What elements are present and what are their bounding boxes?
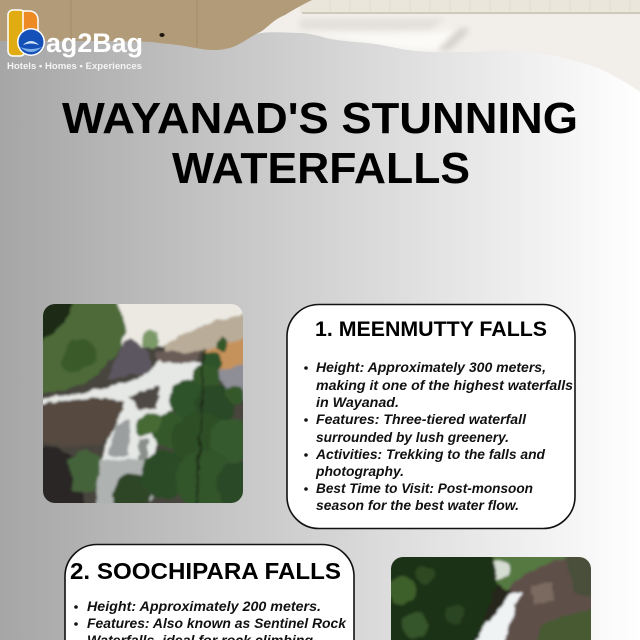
card 1 bullet list	[304, 360, 574, 513]
card 2 bullet list: Height: Approximately 200 meters.	[87, 599, 321, 614]
torn paper header	[0, 0, 640, 92]
card 1 heading: 1. MEENMUTTY FALLS	[315, 318, 547, 341]
brand name: ag2Bag	[46, 28, 143, 58]
title: WATERFALLS	[172, 144, 470, 193]
card 2: Soochipara Falls	[65, 544, 354, 640]
card 1 bullet list: Activities: Trekking to the falls and	[315, 447, 546, 462]
card 1 bullet list: surrounded by lush greenery.	[316, 430, 509, 445]
card 2 heading: 2. SOOCHIPARA FALLS	[70, 558, 341, 584]
card 1 bullet list: Height: Approximately 300 meters,	[316, 360, 546, 375]
card 1 bullet list: Features: Three-tiered waterfall	[316, 412, 526, 427]
card 1 bullet list: making it one of the highest waterfalls	[316, 378, 574, 393]
card 2 bullet list	[74, 599, 348, 640]
tagline: Hotels • Homes • Experiences	[7, 61, 142, 72]
logo	[7, 10, 143, 72]
card 1: Meenmutty Falls	[287, 304, 575, 528]
card 1 bullet list: in Wayanad.	[316, 395, 399, 410]
photo: Meenmutty Falls	[43, 304, 243, 503]
card 2 bullet list: Features: Also known as Sentinel Rock	[87, 616, 348, 631]
photo: Soochipara Falls	[391, 557, 591, 640]
card 1 bullet list: season for the best water flow.	[316, 498, 519, 513]
icon: bag logo	[8, 10, 45, 56]
card 1 bullet list: photography.	[315, 464, 404, 479]
title	[62, 94, 578, 193]
card 1 bullet list: Best Time to Visit: Post-monsoon	[316, 481, 533, 496]
title: WAYANAD'S STUNNING	[62, 94, 578, 143]
